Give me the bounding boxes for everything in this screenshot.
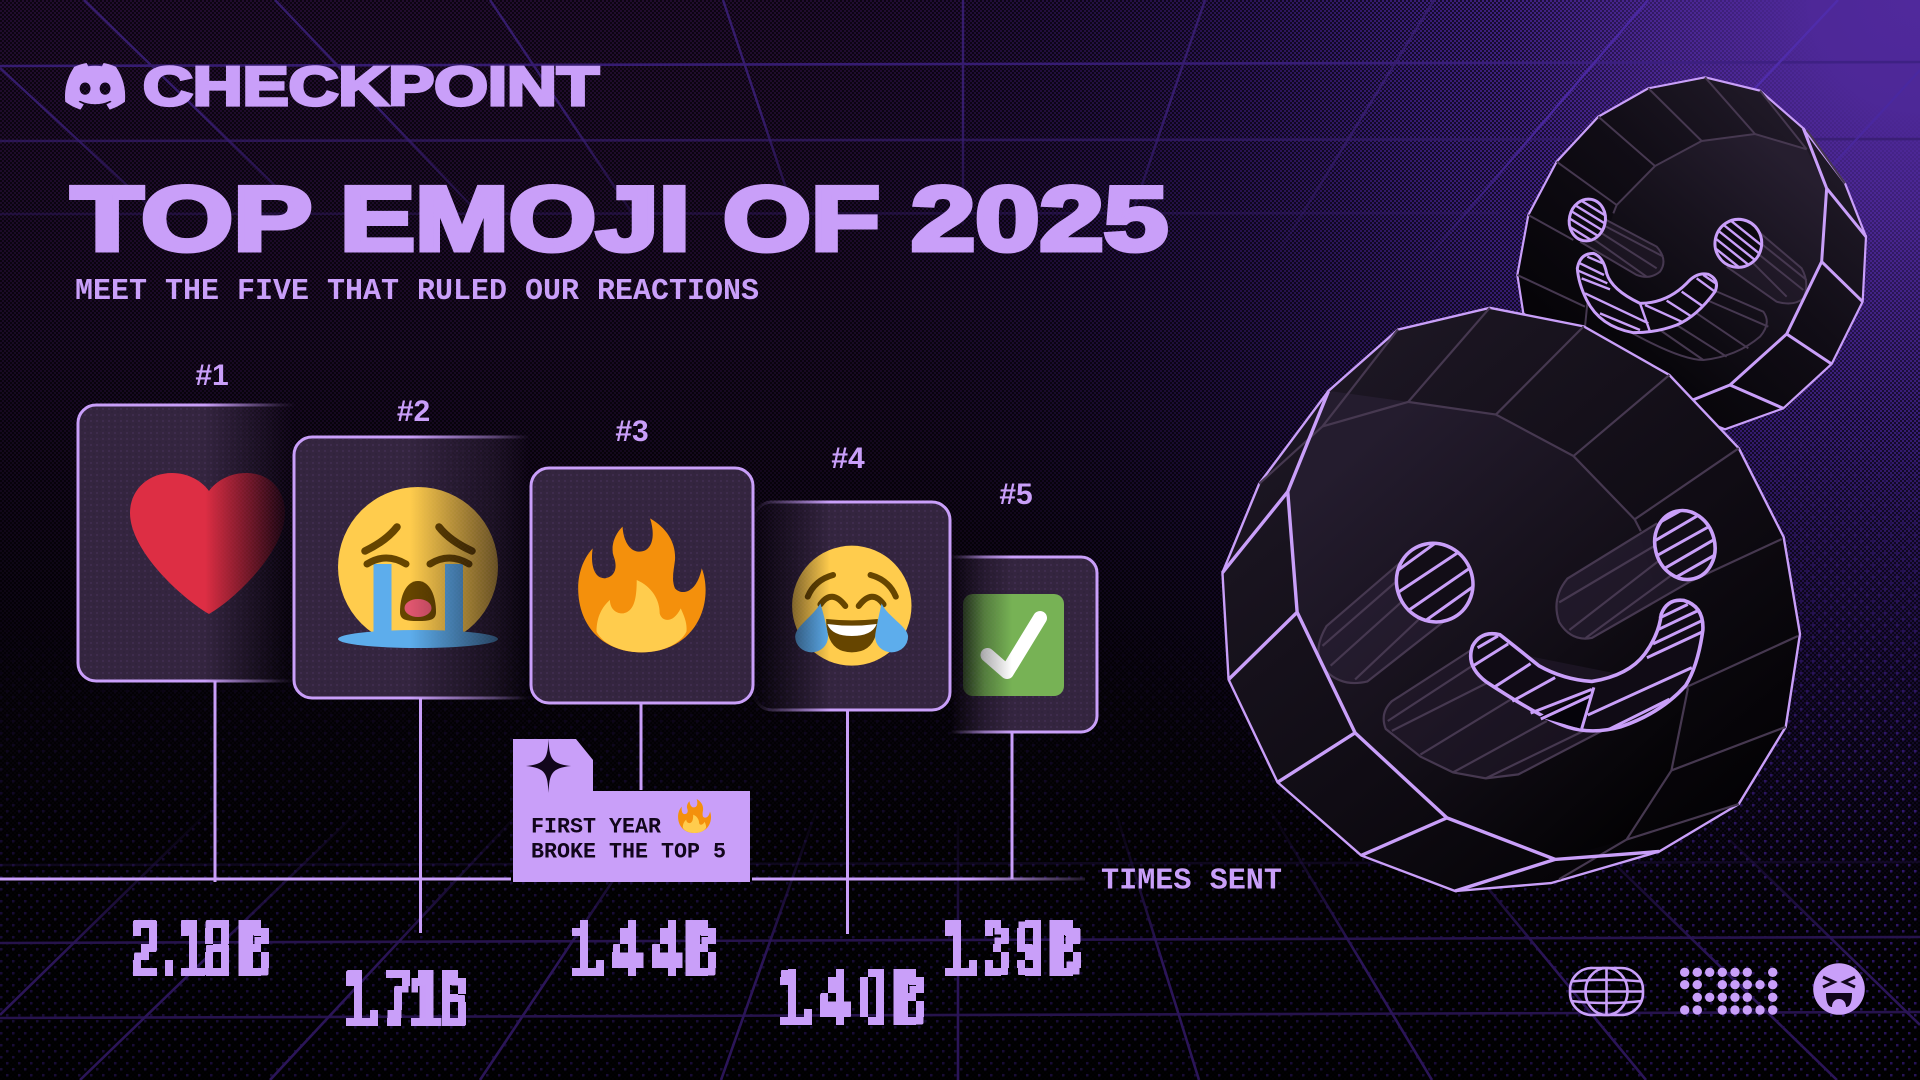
icon: grid globe [1570,968,1643,1015]
icon: red heart [130,473,285,614]
logo: Discord Checkpoint [65,55,599,117]
title: EMOJI [340,169,690,270]
card #3: fire [531,468,753,703]
axis label: TIMES SENT [1101,864,1282,898]
small smiley facets [1517,77,1845,360]
values: times sent: 2.18B [131,905,269,1000]
values: times sent: 1.39B [940,905,1080,1000]
callout: first year broke the top 5 [513,739,750,882]
card #1: heart [78,405,318,681]
rank labels: #5 [999,478,1033,511]
large smiley right eye [1652,508,1717,582]
icon: squinting face with tongue [1813,963,1865,1015]
large smiley facets [1259,308,1798,879]
values: times sent: 1.71B [342,955,467,1050]
icon: fire [578,518,706,652]
rank labels: #4 [831,442,865,475]
icon: dot matrix [1680,968,1777,1015]
small 3D smiley [1517,77,1866,429]
icon: small flame [678,799,711,833]
wordmark: CHECKPOINT [143,55,599,117]
large smiley left eye [1394,542,1475,624]
large smiley near rim [1222,391,1659,891]
icon: laughing face [792,546,912,666]
rank labels: #1 [195,359,229,392]
large smiley body [1222,308,1800,891]
callout text: BROKE THE TOP 5 [531,840,726,864]
callout text: FIRST YEAR [531,814,662,840]
card #2: loudly crying face [294,437,549,698]
values: times sent: 1.44B [569,905,716,1000]
large 3D smiley [1222,308,1800,891]
small smiley front face [1585,134,1827,400]
large smiley front face [1288,391,1686,859]
icon: green check [963,594,1064,696]
card #4: face with tears of joy [754,502,950,710]
icon: crying face [338,487,498,648]
small smiley eyes [1568,198,1764,269]
icon: Discord logo [65,63,125,110]
rank labels [195,359,1033,511]
values: times sent: 1.40B [777,954,924,1049]
title: TOP [71,169,310,270]
card #5: check mark [935,557,1097,732]
icon: sparkle [526,739,571,793]
large smiley mouth [1471,600,1703,731]
values: times sent [131,905,1080,1050]
small smiley near rim [1693,128,1866,408]
title: OF [723,169,880,270]
subtitle: MEET THE FIVE THAT RULED OUR REACTIONS [75,274,759,309]
small smiley mouth [1577,253,1717,333]
rank labels: #3 [615,415,649,448]
connector lines and axis [0,681,1085,934]
title: 2025 [911,169,1168,270]
small smiley body [1517,77,1866,429]
rank labels: #2 [397,395,430,428]
